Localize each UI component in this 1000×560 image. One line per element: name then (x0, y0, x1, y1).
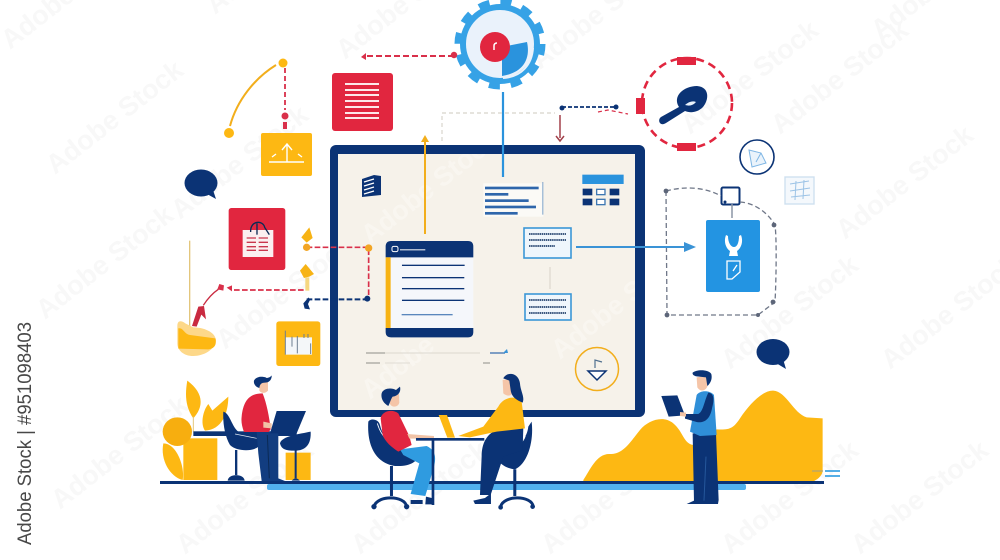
icon: yellow ring with funnel (576, 348, 618, 390)
arrow: red dashed gear to top (361, 52, 457, 60)
torso (458, 398, 525, 437)
stock watermark pattern, background: Adobe Stock (715, 434, 865, 560)
icon: small navy square node (722, 188, 740, 218)
card: text note two (525, 294, 571, 320)
table and yellow laptop (416, 415, 484, 505)
icon: compass circle (740, 140, 774, 174)
faint caption lines on board (366, 349, 508, 363)
stock watermark pattern, background: Adobe Stock (830, 119, 980, 245)
stock watermark pattern, background: Adobe Stock (535, 434, 685, 560)
chair (368, 419, 418, 509)
person: man in seated meeting (368, 387, 435, 509)
second chair (280, 432, 311, 481)
head (390, 394, 399, 407)
stock watermark pattern, background: Adobe Stock (675, 14, 825, 140)
plant and boxes left (163, 381, 311, 480)
stock watermark pattern, background: Adobe Stock (170, 434, 320, 560)
head (503, 379, 513, 396)
stock id side text: Adobe Stock | #951098403 (15, 322, 36, 545)
panel: central board (330, 145, 645, 417)
person: woman in seated meeting (458, 374, 535, 510)
stock watermark pattern, background: Adobe Stock (30, 199, 180, 325)
shoes (411, 500, 423, 504)
arrow: blue arrow to tool card (576, 242, 696, 252)
arrow: grey dashed route round blue card (664, 188, 776, 317)
stock watermark pattern, background: Adobe Stock (345, 434, 495, 560)
torso (690, 391, 717, 436)
red torso (241, 393, 271, 432)
icon: table widget on board (582, 175, 624, 205)
torso (381, 411, 412, 452)
stock watermark pattern, background: Adobe Stock (210, 229, 360, 355)
person: man at left desk (193, 375, 311, 481)
icon: map card (785, 177, 814, 204)
arm (685, 393, 713, 422)
arrow: faint grey dashed connector (442, 113, 555, 141)
board watermark: Adobe (355, 329, 440, 405)
stock watermark pattern, background: Adobe Stock (715, 249, 865, 375)
head (259, 381, 268, 393)
jeans (400, 446, 435, 496)
stock watermark pattern, background: Adobe Stock (40, 54, 190, 180)
text lines block on board (483, 182, 543, 217)
legs (257, 432, 285, 481)
icon: red bag document square (229, 208, 285, 270)
stock watermark pattern, background: Adobe Stock (765, 14, 915, 140)
tablet (661, 395, 685, 417)
shoes (473, 493, 491, 504)
yellow hills background (583, 391, 823, 481)
arrow: red dashed vertical (282, 68, 288, 129)
icon: yellow thin pole and folder (177, 241, 216, 356)
icon: yellow upload square (261, 133, 312, 176)
person: standing man with tablet (661, 370, 719, 504)
stock watermark pattern, background: Adobe Stock (45, 389, 195, 515)
laptop (270, 411, 306, 433)
icon: speech bubble right (756, 339, 790, 369)
panel: window card on board (386, 241, 473, 337)
connector between note cards (549, 267, 551, 289)
stock watermark pattern, background: Adobe Stock (165, 99, 315, 225)
icon: red document square (332, 73, 393, 131)
icon: blue tool card (706, 220, 760, 292)
head (697, 375, 707, 390)
icon: dashed red ring with magnifier (636, 57, 732, 151)
chair (495, 422, 535, 510)
arrow: curved yellow connector (224, 58, 288, 138)
left chair (223, 412, 258, 481)
board watermark: Adobe Stock (545, 239, 695, 365)
icon: yellow chart square (276, 321, 320, 366)
arrow: navy dashed and red drop (556, 104, 628, 141)
ground line (160, 471, 840, 490)
arrow: red dashed links between board and left icons (192, 227, 372, 327)
pants (480, 428, 523, 495)
arrow: blue connector from gear to board (502, 92, 504, 177)
legs (687, 433, 719, 504)
icon: document building on board (362, 175, 381, 197)
stock watermark pattern, background: Adobe Stock (845, 434, 995, 560)
board watermark (355, 124, 695, 405)
icon: speech bubble left (184, 170, 218, 199)
icon: gear with pie (458, 2, 542, 86)
board watermark: Adobe Stock (355, 124, 505, 250)
card: text note one (524, 228, 571, 258)
arrow: yellow up arrow to board (421, 135, 429, 234)
